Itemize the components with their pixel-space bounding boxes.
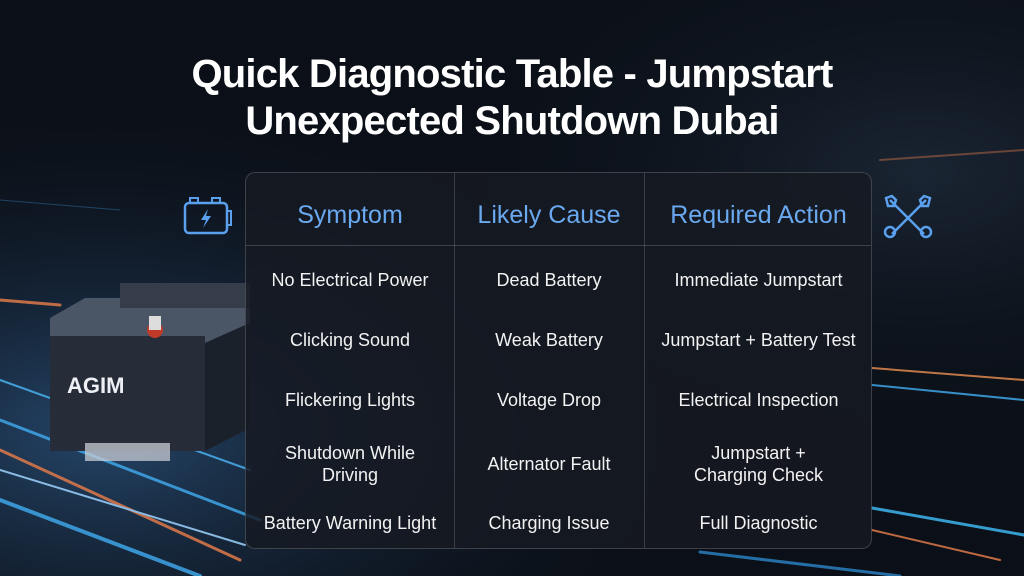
table: Alternator Fault (487, 454, 611, 474)
row 4: Shutdown While (285, 443, 415, 463)
table: Voltage Drop (497, 390, 601, 410)
table: Charging Check (694, 465, 823, 485)
table: Dead Battery (496, 270, 602, 290)
table: Jumpstart + Battery Test (661, 330, 856, 350)
header: Likely Cause: Likely Cause (477, 201, 621, 229)
title (191, 52, 833, 143)
table: Jumpstart + (711, 443, 806, 463)
icon: AGM battery illustration (50, 283, 250, 461)
icon: tools (884, 194, 932, 238)
row 4: Driving (322, 465, 378, 485)
row 3: Flickering Lights (285, 390, 415, 410)
icon: AGM battery illustration: AGIM (67, 373, 124, 398)
table: Electrical Inspection (678, 390, 839, 410)
title: Quick Diagnostic Table - Jumpstart (191, 52, 833, 96)
row 1: No Electrical Power (271, 270, 429, 290)
table: Full Diagnostic (699, 513, 818, 533)
row 5: Battery Warning Light (264, 513, 436, 533)
table: Immediate Jumpstart (674, 270, 843, 290)
table (245, 172, 872, 549)
table: Charging Issue (488, 513, 610, 533)
row 2: Clicking Sound (290, 330, 410, 350)
row 4 (285, 443, 415, 485)
header: Required Action: Required Action (670, 201, 847, 229)
header: Symptom: Symptom (297, 201, 403, 229)
title: Unexpected Shutdown Dubai (245, 99, 779, 143)
table: Weak Battery (495, 330, 603, 350)
icon: battery (184, 197, 232, 234)
